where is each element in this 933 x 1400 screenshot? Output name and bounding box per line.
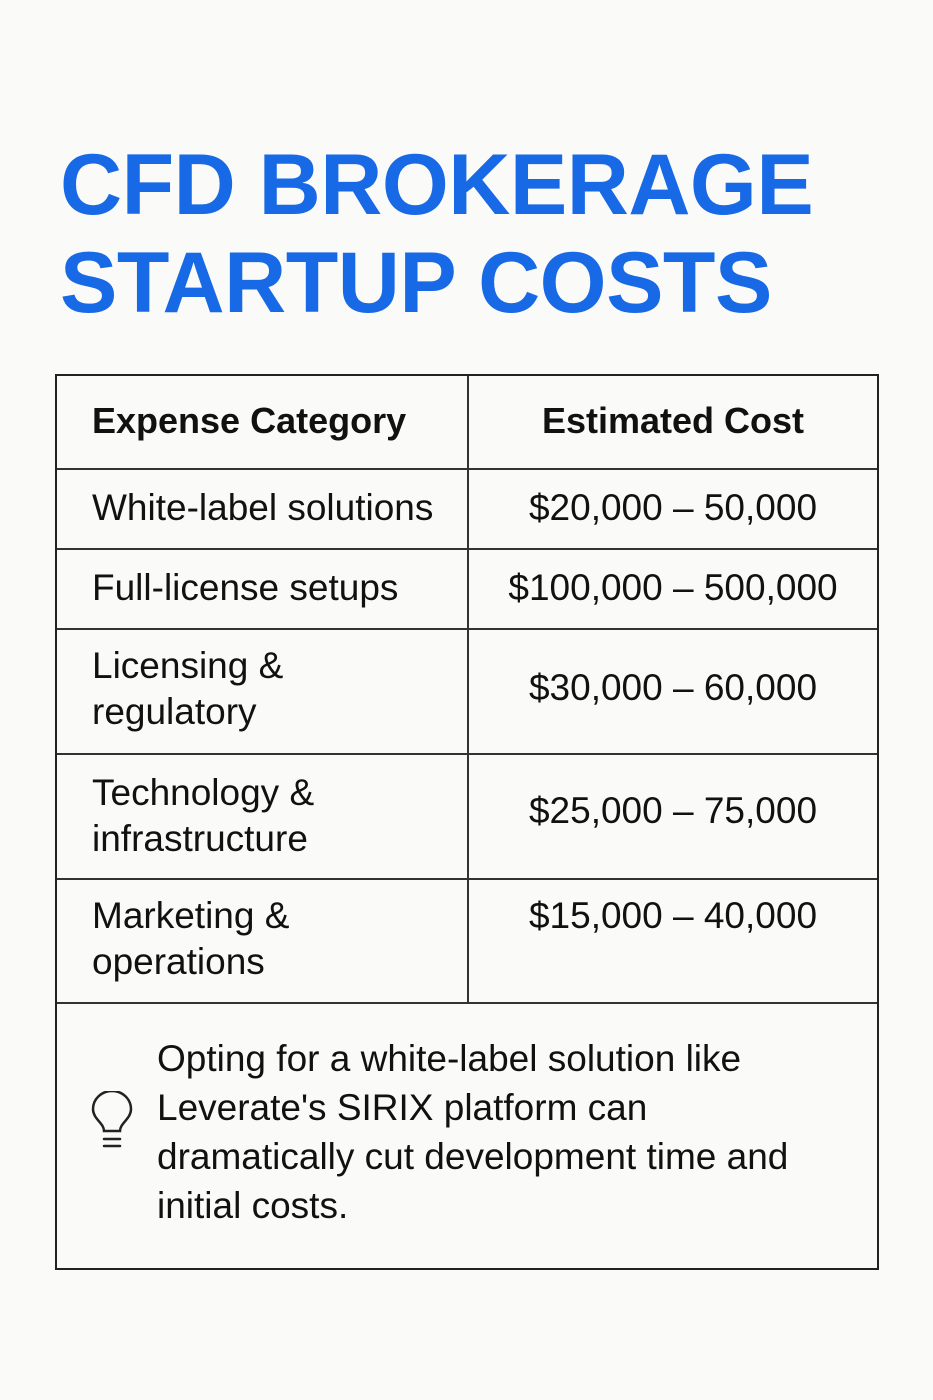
note text: initial costs. — [157, 1185, 348, 1226]
title: STARTUP COSTS — [60, 235, 772, 331]
note text: Opting for a white-label solution like — [157, 1038, 741, 1079]
row: marketing: Marketing & — [92, 895, 289, 936]
row: licensing — [92, 645, 283, 732]
row: licensing: Licensing & — [92, 645, 283, 686]
cost: marketing: $15,000 – 40,000 — [529, 895, 817, 936]
cost: white-label: $20,000 – 50,000 — [529, 487, 817, 528]
header: expense category: Expense Category — [92, 400, 406, 441]
row: full-license: Full-license setups — [92, 567, 398, 608]
row: technology: Technology & — [92, 772, 314, 813]
icon: lightbulb — [92, 1091, 132, 1148]
row: marketing — [92, 895, 289, 982]
cost: licensing: $30,000 – 60,000 — [529, 667, 817, 708]
cost: full-license: $100,000 – 500,000 — [508, 567, 838, 608]
row: licensing: regulatory — [92, 691, 257, 732]
note text — [157, 1038, 788, 1226]
row: technology — [92, 772, 314, 859]
cost: technology: $25,000 – 75,000 — [529, 790, 817, 831]
title: CFD BROKERAGE — [60, 137, 813, 233]
note text: dramatically cut development time and — [157, 1136, 788, 1177]
row: marketing: operations — [92, 941, 265, 982]
row: white-label: White-label solutions — [92, 487, 433, 528]
table: startup costs — [55, 374, 879, 1270]
note text: Leverate's SIRIX platform can — [157, 1087, 647, 1128]
row: technology: infrastructure — [92, 818, 308, 859]
title — [60, 137, 813, 331]
header: estimated cost: Estimated Cost — [542, 400, 804, 441]
